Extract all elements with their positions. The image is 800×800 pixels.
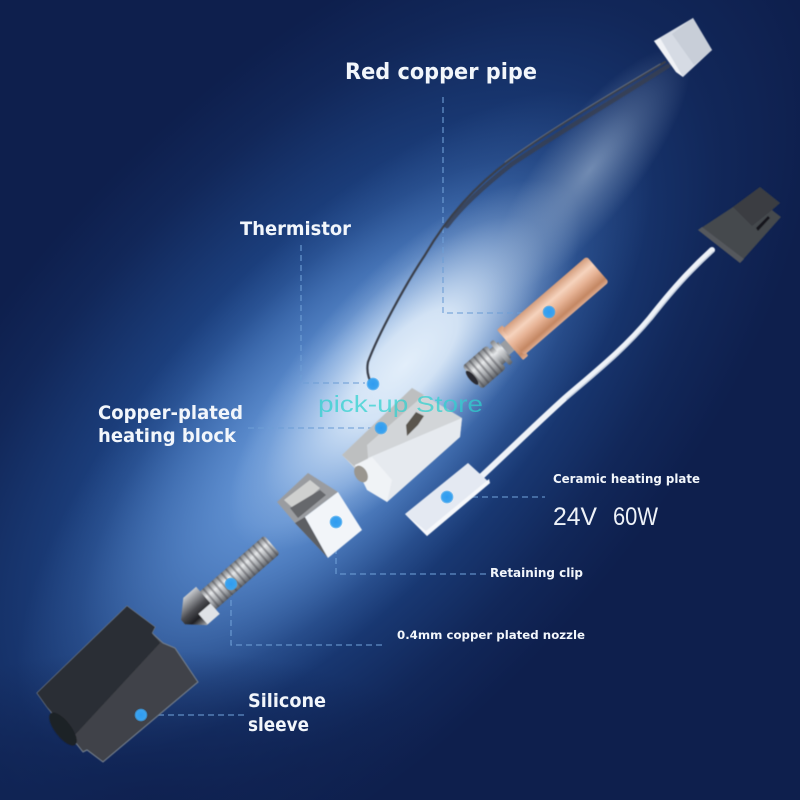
silicone sleeve — [37, 606, 198, 762]
ceramic heating plate — [405, 463, 490, 536]
copper pipe with threaded end — [457, 254, 611, 395]
watermark: pick-up Store — [318, 391, 483, 417]
label: nozzle: 0.4mm copper plated nozzle — [397, 628, 585, 642]
leader lines — [148, 97, 545, 715]
label: silicone sleeve — [248, 690, 326, 736]
label: silicone sleeve: sleeve — [248, 714, 309, 736]
label: silicone sleeve: Silicone — [248, 690, 326, 712]
label: copper-plated heating block: Copper-plated — [98, 402, 243, 424]
thermistor wire — [367, 62, 668, 386]
label: voltage and wattage: 24V — [553, 503, 597, 531]
retaining clip — [277, 473, 362, 558]
marker dots — [134, 306, 556, 722]
white thermistor connector — [654, 18, 712, 77]
label: retaining clip: Retaining clip — [490, 566, 583, 580]
label: voltage and wattage — [553, 503, 658, 531]
label: thermistor: Thermistor — [240, 218, 352, 240]
label: red copper pipe: Red copper pipe — [345, 60, 537, 85]
label: copper-plated heating block — [98, 402, 243, 447]
label: copper-plated heating block: heating block — [98, 425, 236, 447]
heating block — [342, 388, 462, 502]
label: ceramic heating plate: Ceramic heating plate — [553, 472, 700, 486]
label: voltage and wattage: 60W — [613, 503, 658, 531]
black heater connector — [698, 187, 781, 263]
white heater cable — [470, 250, 714, 487]
nozzle — [171, 531, 284, 636]
